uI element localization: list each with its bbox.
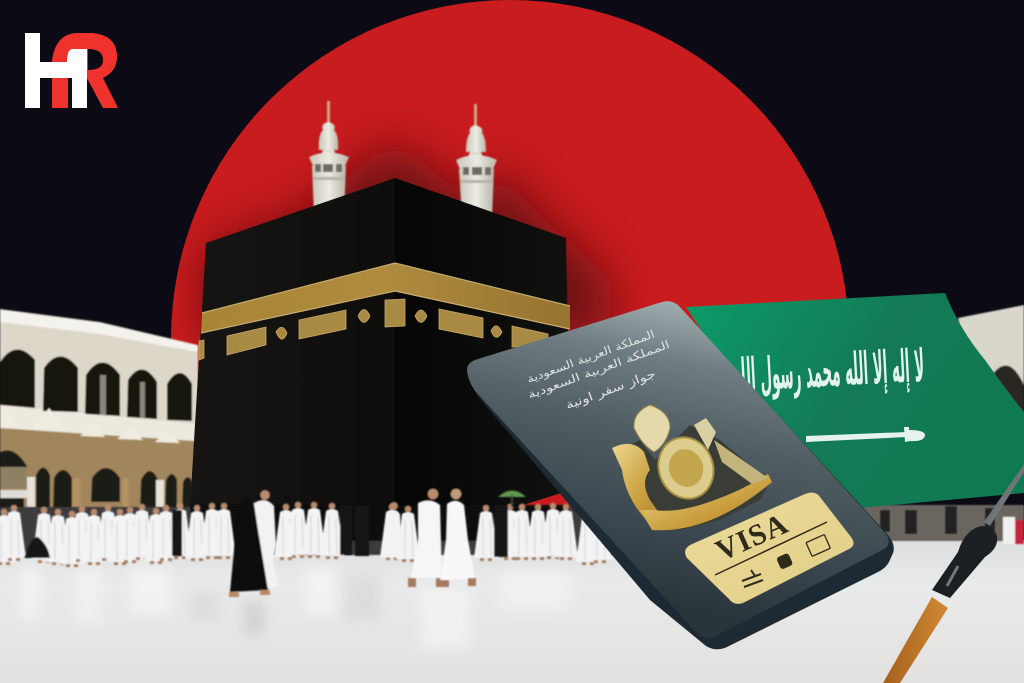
pen bbox=[883, 464, 1024, 683]
pilgrim three bbox=[382, 510, 402, 558]
foreground figures bbox=[229, 488, 476, 597]
crowd background band bbox=[0, 505, 1024, 555]
kaaba gold band bbox=[201, 263, 570, 333]
right mosque building bbox=[958, 305, 1024, 440]
passport emblem bbox=[612, 405, 772, 530]
passport arabic text bbox=[525, 328, 672, 413]
logo red R bbox=[52, 33, 118, 108]
visa word: VISA bbox=[711, 507, 793, 568]
woman in abaya bbox=[230, 498, 268, 592]
left minaret bbox=[309, 101, 349, 215]
passport arabic text: المملكة العربية السعودية bbox=[526, 338, 672, 401]
flag sword bbox=[806, 427, 925, 442]
passport bbox=[467, 301, 894, 649]
passport arabic text: جواز سفر اونية bbox=[564, 366, 658, 413]
lower arches bbox=[0, 450, 192, 510]
man in white bbox=[254, 500, 278, 588]
kaaba left face bbox=[190, 178, 395, 545]
left mosque building bbox=[0, 309, 198, 512]
passport shadow edge bbox=[467, 302, 894, 649]
visa label icons bbox=[742, 535, 830, 587]
walking pilgrim one bbox=[411, 500, 442, 578]
passport arabic text: المملكة العربية السعودية bbox=[525, 328, 656, 386]
right minaret bbox=[456, 104, 497, 218]
pilgrims crowd bbox=[0, 490, 612, 567]
visa label bbox=[685, 493, 854, 604]
small domes bbox=[0, 405, 180, 443]
logo white H bbox=[25, 33, 87, 108]
kaaba gold panels bbox=[199, 299, 548, 360]
kaaba right face bbox=[395, 178, 571, 545]
upper arches bbox=[0, 349, 192, 421]
umbrella bbox=[498, 490, 526, 497]
saudi flag bbox=[686, 293, 1024, 508]
passport cover bbox=[467, 301, 889, 638]
logo: HR bbox=[25, 33, 118, 108]
walking pilgrim two bbox=[440, 501, 475, 581]
marble floor bbox=[0, 540, 1024, 683]
kaaba bbox=[190, 178, 571, 545]
red circle bbox=[171, 0, 846, 508]
